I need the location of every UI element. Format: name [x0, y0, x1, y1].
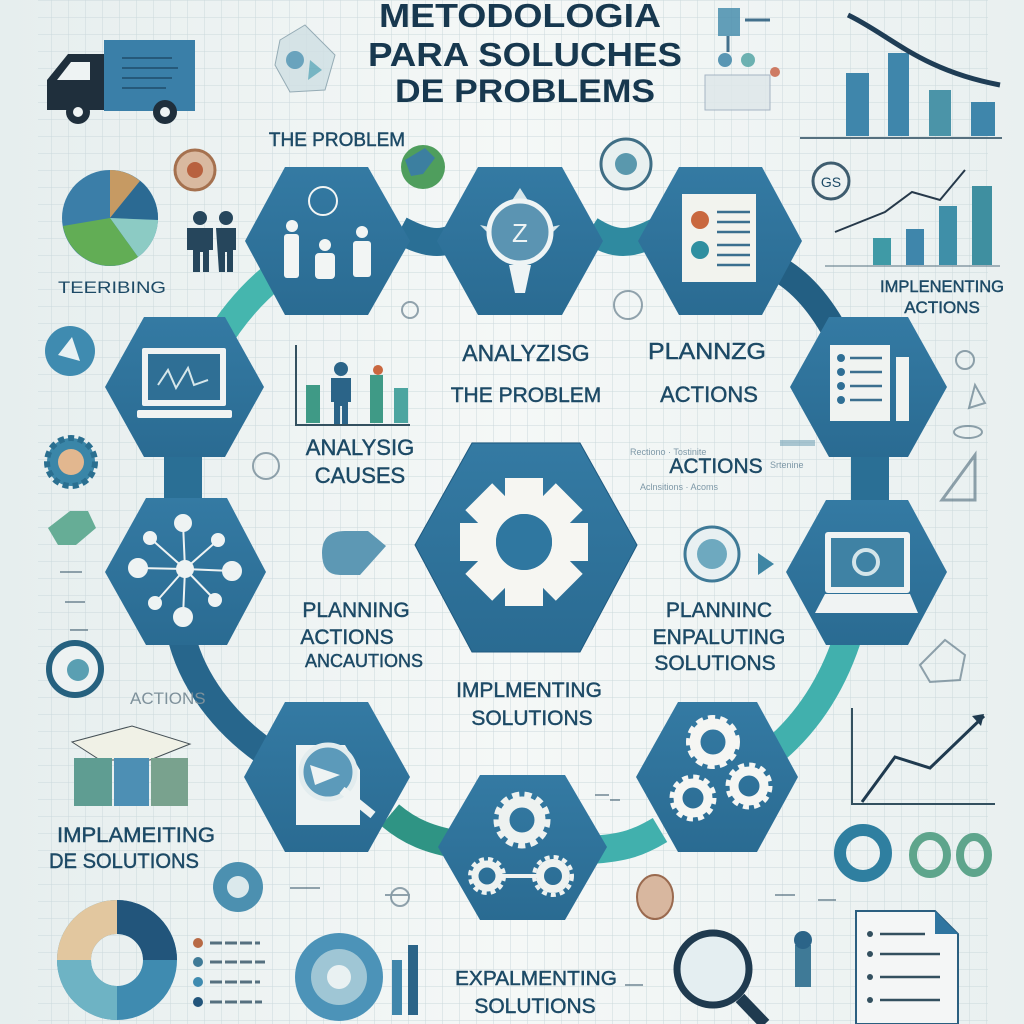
label: planning actions and actions: PLANNING [302, 599, 410, 622]
label: planning actions and actions [300, 599, 423, 671]
icon: small arrow badge [322, 531, 386, 575]
label: planning evaluating solutions: PLANNINC [666, 599, 772, 622]
label: planning actions [648, 338, 766, 407]
title: DE PROBLEMS [395, 73, 655, 109]
step 7: linked gears hexagon [438, 775, 607, 920]
process ring connectors [180, 230, 870, 850]
icon: network [129, 515, 241, 626]
line and bar chart: right [825, 170, 1000, 266]
label: planning actions: PLANNZG [648, 338, 766, 364]
icon: laptop [137, 348, 232, 418]
label: implementing actions: IMPLENENTING [880, 277, 1004, 296]
radial chart [295, 933, 418, 1021]
step 6: three gears hexagon [636, 702, 798, 852]
label: planning actions and actions: ACTIONS [300, 626, 394, 649]
icon: radial magnifier: Z [512, 218, 528, 248]
label: planning evaluating solutions: SOLUTIONS [654, 652, 776, 675]
title: PARA SOLUCHES [368, 36, 682, 73]
label: actions: ACTIONS [669, 455, 763, 478]
bar chart: top right [800, 15, 1002, 138]
chart: isometric map [72, 726, 190, 806]
icon: two people [187, 211, 236, 272]
label: analysing causes: CAUSES [315, 463, 405, 488]
icon: top sketch shield [275, 25, 335, 92]
step 4: checklist hexagon [790, 317, 947, 457]
label: implementing solutions [456, 679, 602, 730]
icon: teal disc [213, 862, 263, 912]
label: implementing actions [880, 277, 1004, 317]
label: implementing de solutions: IMPLAMEITING [57, 824, 215, 847]
faint notes around actions: Aclnsitions · Acoms [640, 482, 719, 492]
icons: scattered small sketches [60, 291, 985, 985]
faint notes around actions [630, 440, 815, 492]
label: analysing causes [306, 435, 414, 488]
icon: ring with arrow [685, 527, 774, 581]
label: analyzing the problem [451, 340, 601, 407]
step 9: network hexagon [105, 498, 266, 645]
icon: checklist [830, 345, 909, 421]
pie chart [62, 170, 158, 266]
label: evaluating solutions [455, 968, 617, 1018]
icon: top teal ring [601, 139, 651, 189]
label: implementing solutions: IMPLMENTING [456, 679, 602, 702]
icon: document page [856, 911, 958, 1024]
icon: radial magnifier [480, 188, 560, 293]
icon: main gear [460, 478, 588, 606]
label: describing: TEERIBING [58, 278, 166, 297]
step 3: planning document hexagon [638, 167, 802, 315]
legend list [193, 938, 265, 1007]
label: implementing de solutions [49, 824, 215, 873]
label: the problem: THE PROBLEM [269, 130, 405, 151]
icon: people around a target [284, 187, 371, 279]
label: implementing solutions: SOLUTIONS [471, 707, 593, 730]
label: planning evaluating solutions [653, 599, 785, 675]
icons: lower right rings [840, 830, 988, 876]
faint notes around actions: Srtenine [770, 460, 804, 470]
step 8: magnifier hexagon [244, 702, 410, 852]
label: evaluating solutions: EXPALMENTING [455, 968, 617, 990]
step 5: laptop hexagon [786, 500, 947, 645]
label: evaluating solutions: SOLUTIONS [474, 995, 596, 1018]
label: analyzing the problem: THE PROBLEM [451, 384, 601, 407]
label: analyzing the problem: ANALYZISG [462, 340, 590, 366]
small bar chart with person [296, 345, 410, 425]
label: implementing de solutions: DE SOLUTIONS [49, 850, 199, 873]
icon: delivery truck [47, 40, 195, 124]
icon: document [682, 194, 756, 282]
icon: laptop [815, 532, 918, 613]
icon: gears [470, 795, 572, 895]
icon: magnifier on page [296, 745, 373, 825]
icon: top right diagram [705, 8, 780, 110]
icon: ring badge right: GS [821, 174, 841, 190]
step 1: the problem hexagon [245, 167, 410, 315]
faint notes around actions: Rectiono · Tostinite [630, 447, 706, 457]
line chart: lower right [852, 708, 995, 804]
central gear hexagon [415, 443, 637, 652]
label: planning actions and actions: ANCAUTIONS [305, 651, 423, 671]
icon: gears [672, 718, 770, 819]
icon: copper medallion [637, 875, 673, 919]
label: planning actions: ACTIONS [660, 382, 758, 407]
label: implementing actions: ACTIONS [904, 298, 980, 317]
icon: magnifying glass [677, 933, 765, 1024]
icon: green sphere [401, 145, 445, 189]
label: planning evaluating solutions: ENPALUTING [653, 626, 785, 649]
icon: ring badge right [813, 163, 849, 199]
step 10: monitor hexagon [105, 317, 264, 457]
icon: copper badge [175, 150, 215, 190]
icon: small bust [794, 931, 812, 987]
step 2: analysis hexagon [437, 167, 603, 315]
icon: left badges [45, 326, 101, 695]
donut chart [74, 917, 160, 1003]
title [368, 0, 682, 109]
label: analysing causes: ANALYSIG [306, 435, 414, 460]
label: actions left: ACTIONS [130, 689, 206, 708]
